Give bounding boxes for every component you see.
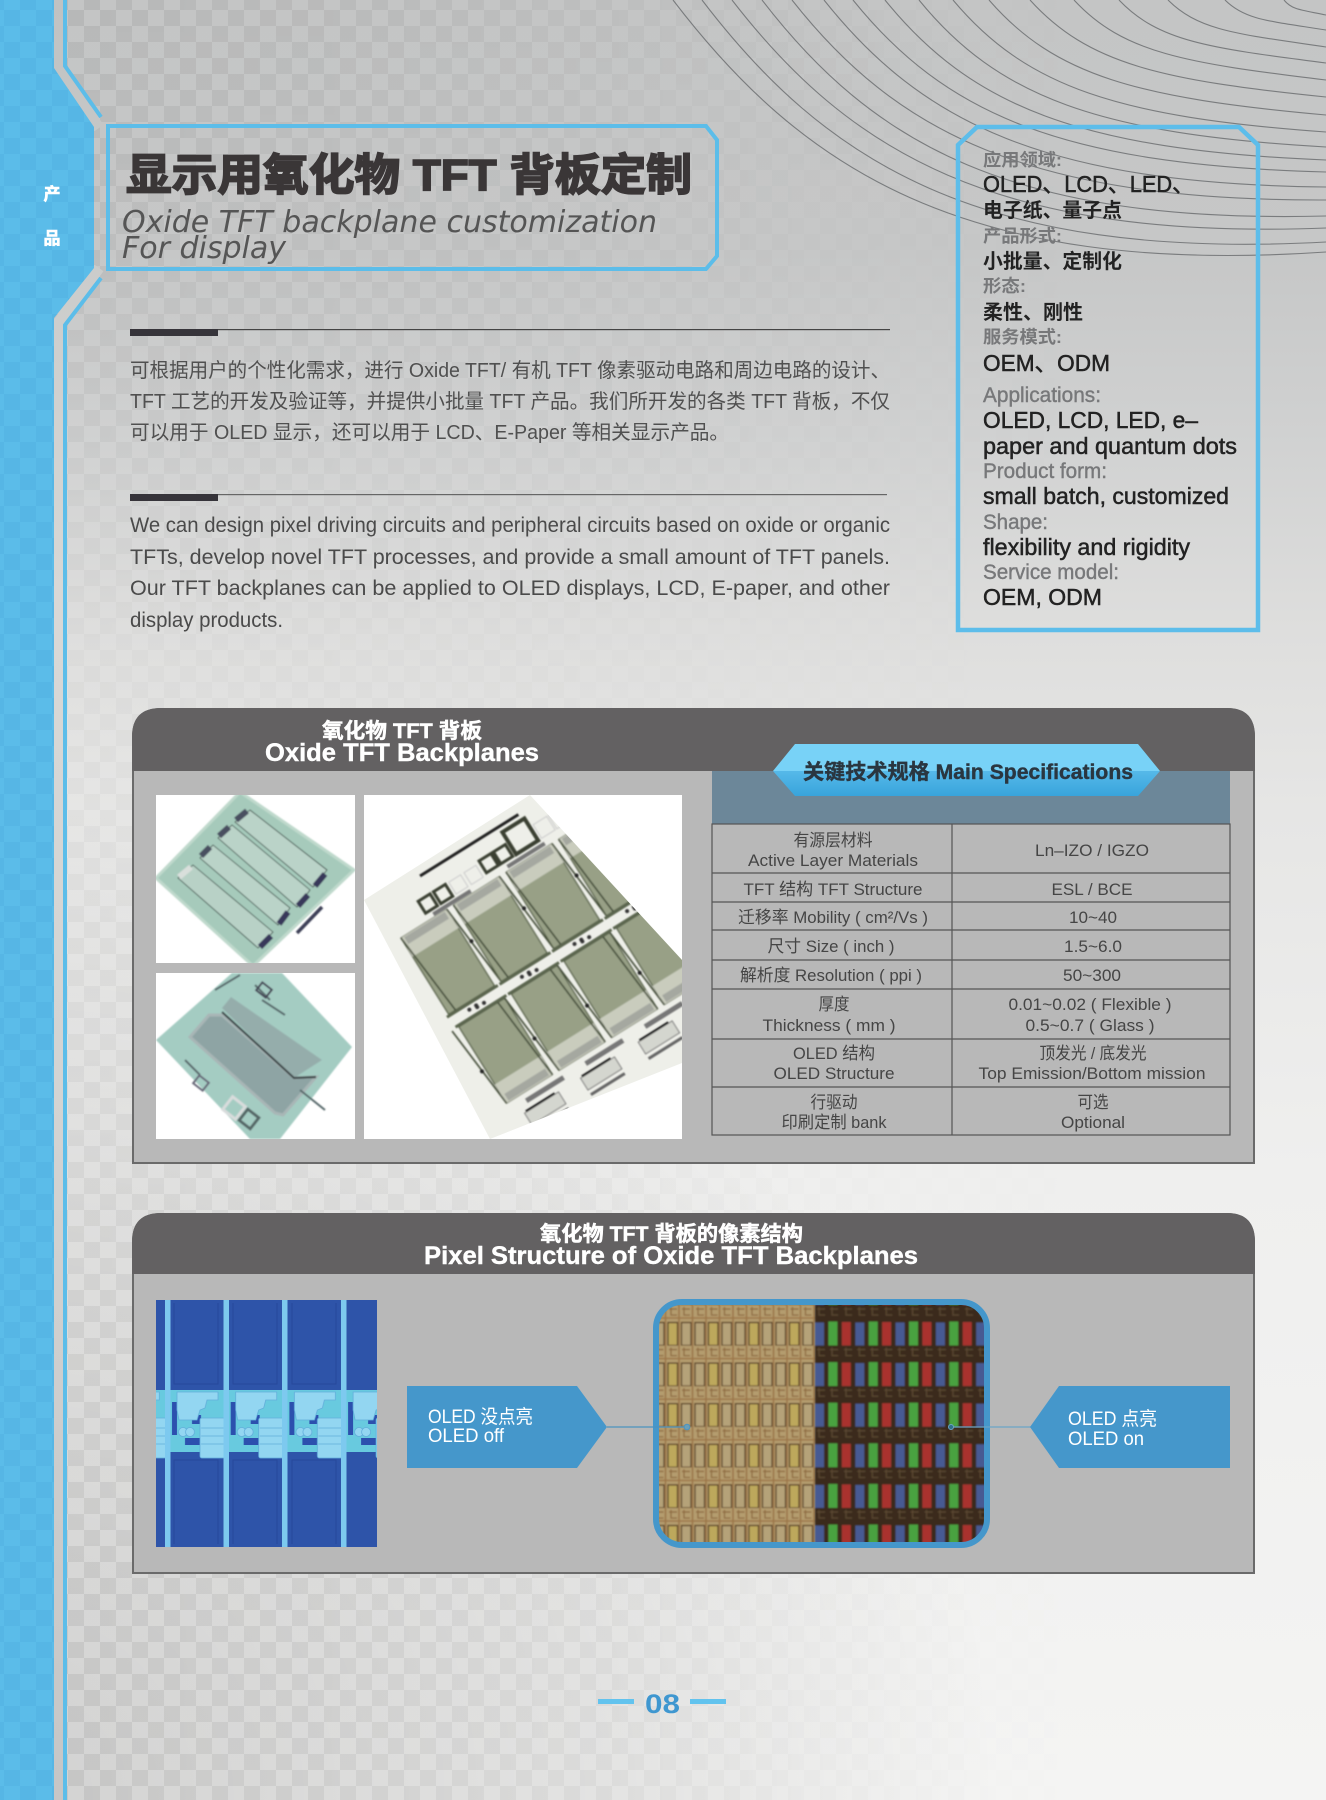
row: mobility <box>738 908 1117 927</box>
Chinese description: TFT 工艺的开发及验证等，并提供小批量 TFT 产品。我们所开发的各类 TFT 背板，不仅 <box>130 390 890 413</box>
English description: TFTs, develop novel TFT processes, and provide a small amount of TFT panels. <box>130 545 890 569</box>
row: OLED structure: OLED Structure <box>774 1064 894 1083</box>
panel: applications and service info: 小批量、定制化 <box>983 249 1122 273</box>
row: OLED structure: OLED 结构 <box>793 1044 875 1063</box>
panel: applications and service info <box>958 127 1258 630</box>
panel: applications and service info: small batch, customized <box>983 483 1229 509</box>
row: bank <box>782 1093 1125 1132</box>
page number <box>598 1689 726 1719</box>
image: blue pixel layout <box>156 1300 377 1547</box>
panel: applications and service info: 柔性、刚性 <box>983 301 1083 324</box>
row: thickness <box>762 995 1172 1035</box>
photo: single display glass sample <box>156 973 355 1139</box>
sidebar label: 产 <box>44 180 60 205</box>
row: resolution <box>740 966 1121 985</box>
row: thickness: 0.5~0.7 ( Glass ) <box>1026 1016 1154 1035</box>
badge: main specifications: 关键技术规格 Main Specifications <box>803 761 1133 784</box>
panel: applications and service info: OLED、LCD、LED、 <box>983 171 1194 197</box>
callout: OLED off: OLED off <box>428 1426 505 1447</box>
callout: OLED off <box>407 1386 607 1468</box>
connector: on callout to image <box>948 1424 1031 1430</box>
panel heading <box>265 720 539 767</box>
panel: applications and service info: 应用领域: <box>983 150 1062 170</box>
Chinese description: 可以用于 OLED 显示，还可以用于 LCD、E-Paper 等相关显示产品。 <box>130 421 729 444</box>
panel heading: Pixel Structure of Oxide TFT Backplanes <box>424 1242 918 1270</box>
English description: Our TFT backplanes can be applied to OLED displays, LCD, E-paper, and other <box>130 576 890 600</box>
panel: applications and service info: OEM、ODM <box>983 350 1110 376</box>
row: thickness: Thickness ( mm ) <box>762 1016 896 1035</box>
panel: applications and service info: Applications: <box>983 384 1101 407</box>
row: TFT structure: TFT 结构 TFT Structure <box>744 880 922 899</box>
connector: off callout to image <box>607 1424 690 1430</box>
row: bank: Optional <box>1061 1113 1125 1132</box>
row: active layer: Active Layer Materials <box>748 851 918 870</box>
left blue sidebar <box>0 0 101 1800</box>
panel: applications and service info: Product form: <box>983 460 1107 483</box>
panel: oxide TFT backplanes <box>132 708 1255 1163</box>
spec table <box>712 771 1230 1135</box>
panel: applications and service info: 电子纸、量子点 <box>983 199 1122 222</box>
callout: OLED on <box>1030 1386 1230 1468</box>
panel heading: Oxide TFT Backplanes <box>265 739 539 767</box>
row: bank: 行驱动 <box>810 1093 858 1112</box>
row: mobility: 迁移率 Mobility ( cm²/Vs ) <box>738 908 928 927</box>
row: resolution: 50~300 <box>1063 966 1121 985</box>
sidebar label <box>44 180 60 249</box>
subtitle <box>122 205 657 266</box>
photo: striped glass sample <box>156 792 355 966</box>
row: size: 1.5~6.0 <box>1064 937 1122 956</box>
image: OLED pixels off and on <box>656 1302 987 1545</box>
English description: We can design pixel driving circuits and peripheral circuits based on oxide or organic <box>130 513 890 537</box>
panel: applications and service info: 产品形式: <box>983 226 1062 246</box>
panel: applications and service info: paper and quantum dots <box>983 433 1237 459</box>
row: active layer <box>748 831 1149 870</box>
row: size <box>768 937 1122 956</box>
row: active layer: Ln–IZO / IGZO <box>1035 841 1149 860</box>
title box <box>108 126 717 269</box>
callout: OLED on: OLED on <box>1068 1429 1144 1450</box>
main title: 显示用氧化物 TFT 背板定制 <box>126 151 692 200</box>
row: bank: 印刷定制 bank <box>782 1113 887 1132</box>
panel: applications and service info: Shape: <box>983 511 1048 534</box>
row: OLED structure: 顶发光 / 底发光 <box>1040 1044 1146 1063</box>
callout: OLED on: OLED 点亮 <box>1068 1408 1157 1430</box>
panel heading <box>424 1223 918 1270</box>
row: TFT structure <box>744 880 1132 899</box>
Chinese description: 可根据用户的个性化需求，进行 Oxide TFT/ 有机 TFT 像素驱动电路和周边电路的设计、 <box>130 359 890 382</box>
decorative arcs top right <box>673 0 1326 256</box>
badge: main specifications <box>773 744 1160 796</box>
panel: applications and service info: flexibility and rigidity <box>983 534 1191 560</box>
row: bank: 可选 <box>1078 1093 1108 1112</box>
panel heading: 氧化物 TFT 背板的像素结构 <box>540 1223 803 1246</box>
row: thickness: 0.01~0.02 ( Flexible ) <box>1008 995 1172 1014</box>
row: OLED structure: Top Emission/Bottom mission <box>978 1064 1206 1083</box>
panel: pixel structure <box>132 1213 1255 1573</box>
panel heading: 氧化物 TFT 背板 <box>322 720 482 743</box>
row: mobility: 10~40 <box>1069 908 1117 927</box>
English description <box>130 494 890 632</box>
row: OLED structure <box>774 1044 1206 1083</box>
row: thickness: 厚度 <box>818 995 850 1014</box>
page number: 08 <box>645 1689 680 1719</box>
Chinese description <box>130 329 890 444</box>
row: TFT structure: ESL / BCE <box>1052 880 1132 899</box>
row: size: 尺寸 Size ( inch ) <box>768 937 894 956</box>
row: resolution: 解析度 Resolution ( ppi ) <box>740 966 922 985</box>
panel: applications and service info: Service model: <box>983 561 1119 584</box>
sidebar label: 品 <box>44 224 60 249</box>
subtitle: Oxide TFT backplane customization <box>122 205 657 240</box>
subtitle: For display <box>122 231 287 266</box>
panel: applications and service info: 形态: <box>983 276 1026 296</box>
panel: applications and service info: 服务模式: <box>983 327 1062 347</box>
photo: multi-panel backplane sheet <box>364 795 682 1139</box>
row: active layer: 有源层材料 <box>794 831 872 850</box>
callout: OLED off: OLED 没点亮 <box>428 1406 533 1428</box>
panel: applications and service info: OEM, ODM <box>983 584 1102 610</box>
English description: display products. <box>130 608 283 632</box>
panel: applications and service info: OLED, LCD, LED, e– <box>983 407 1198 433</box>
